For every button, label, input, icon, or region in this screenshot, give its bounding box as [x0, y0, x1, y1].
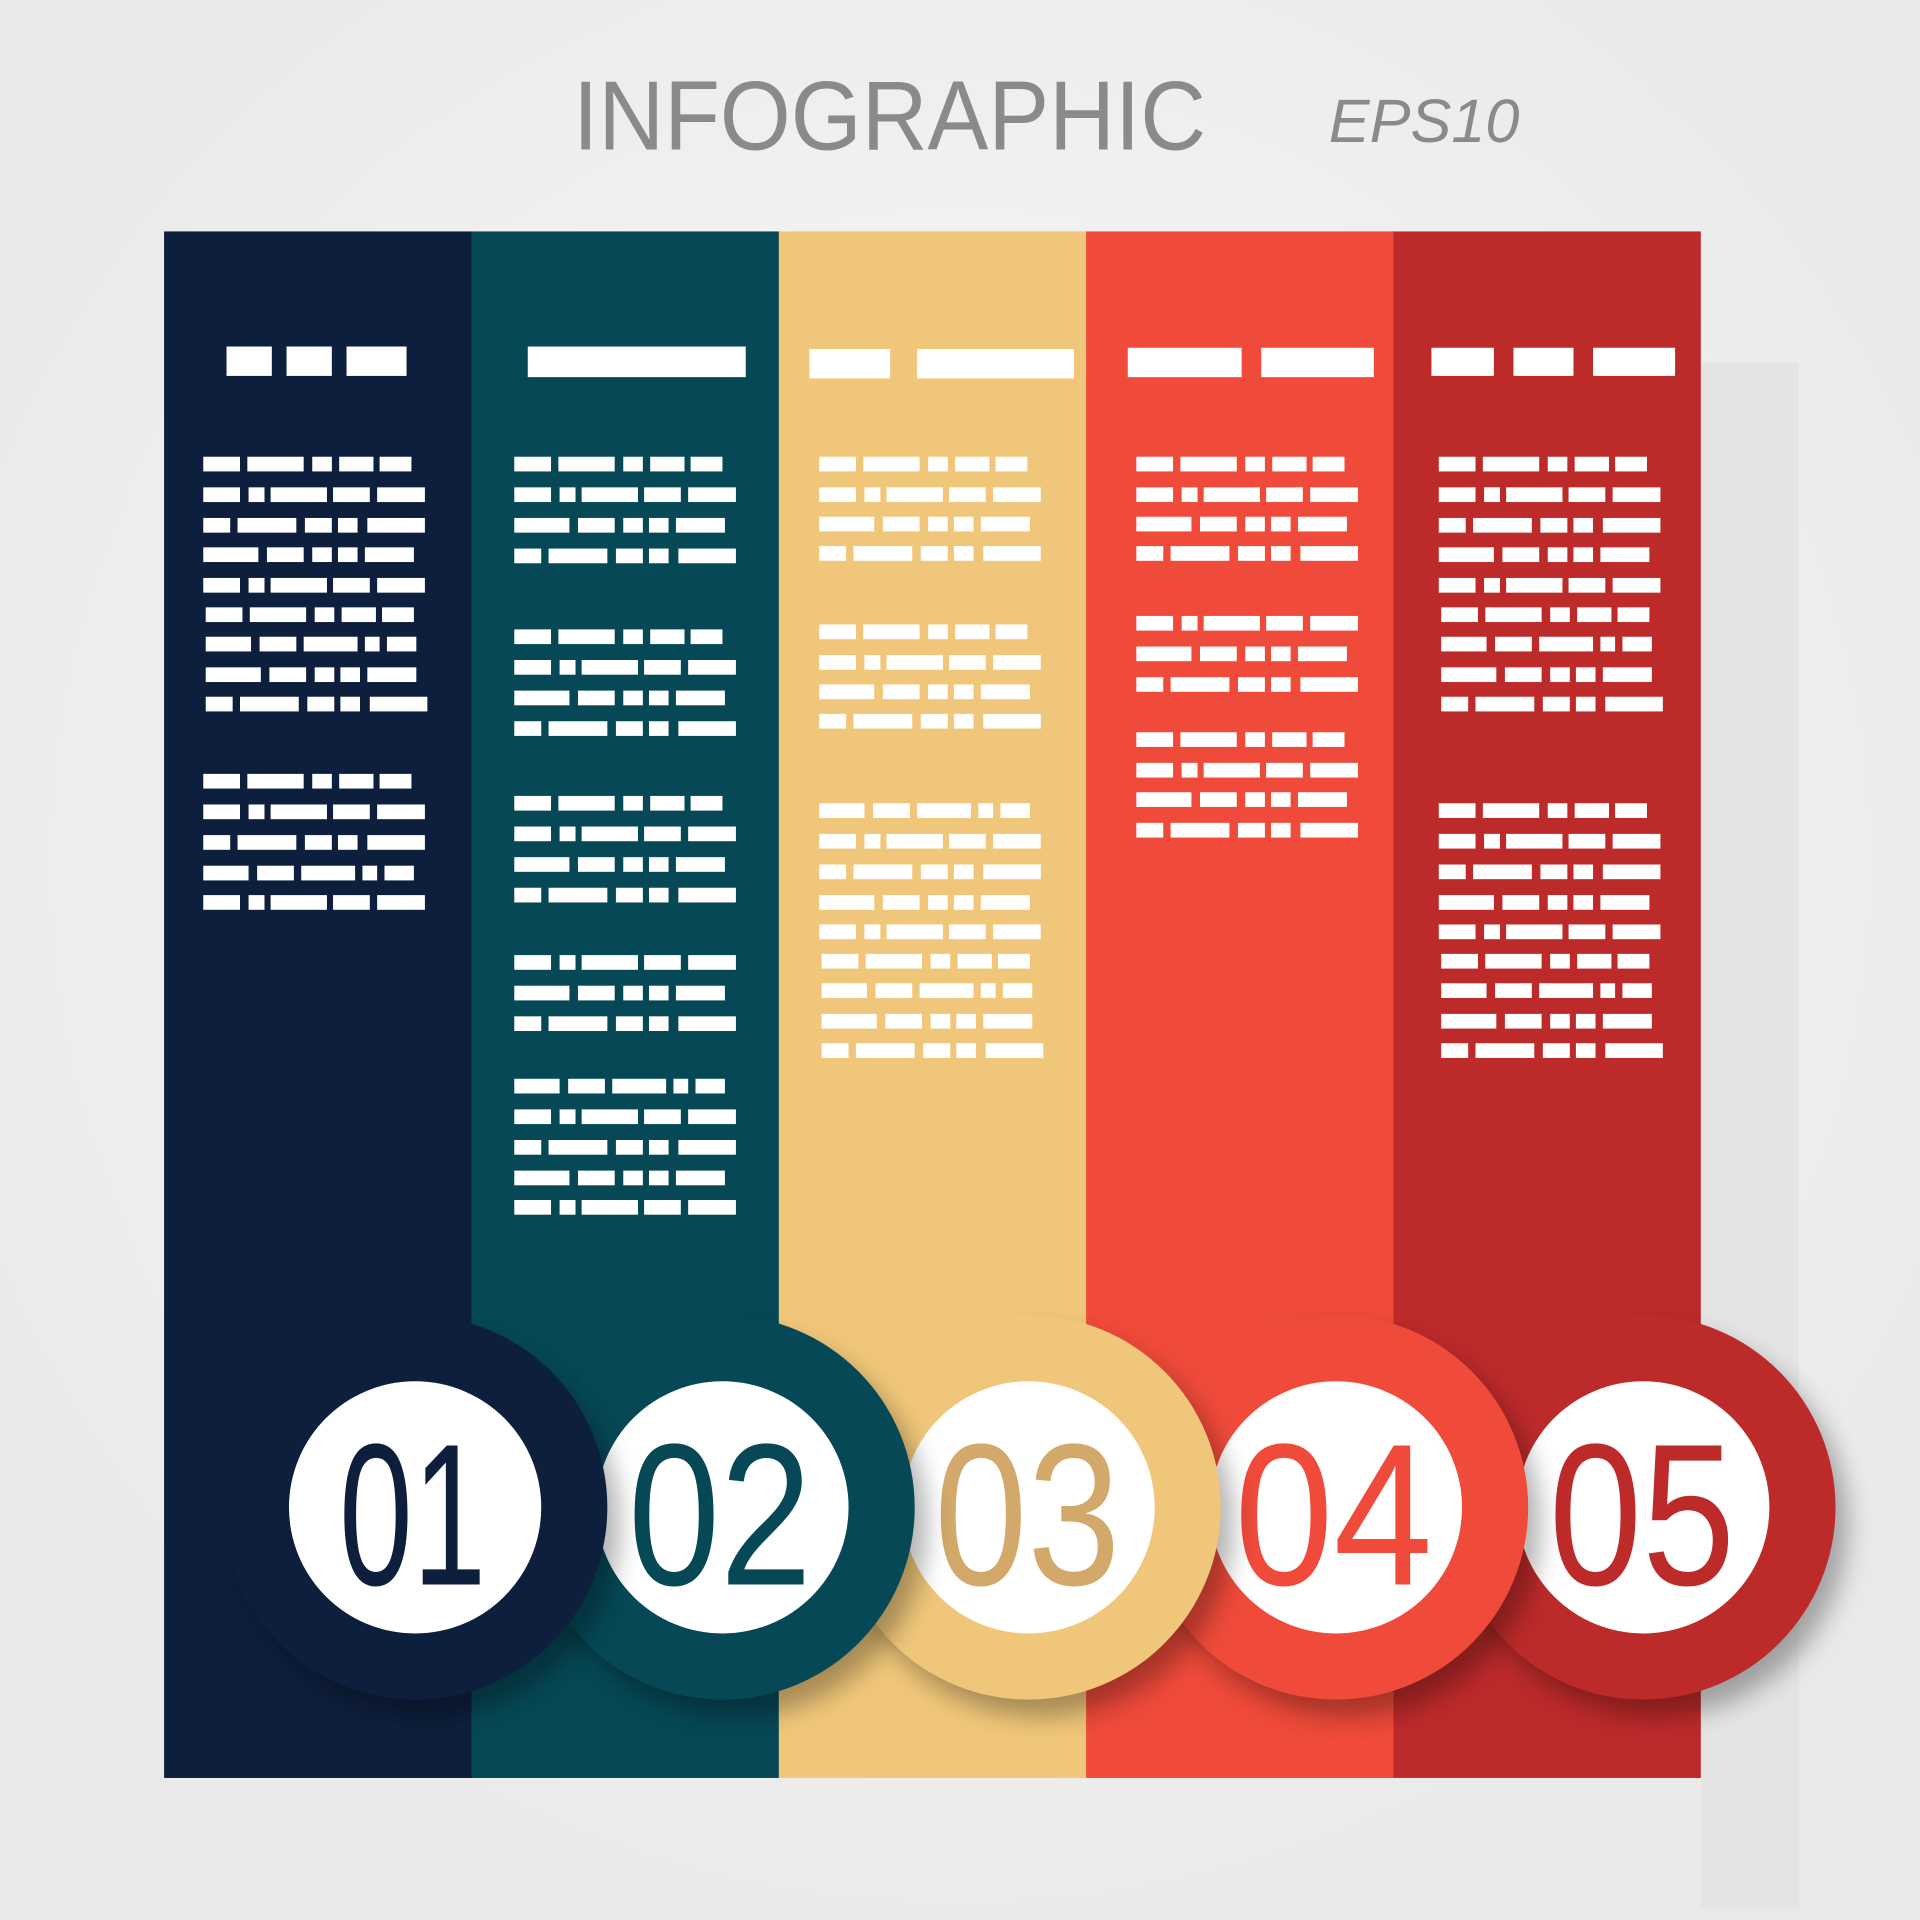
panel: column 4: [1086, 231, 1395, 1778]
badge 02: [530, 1315, 927, 1717]
badge 05: 05: [1549, 1401, 1735, 1627]
badge 03: [836, 1315, 1233, 1717]
panel: column 2: [471, 231, 780, 1778]
title: INFOGRAPHIC: [573, 60, 1206, 170]
badge 03: 03: [934, 1401, 1120, 1627]
panel: column 3: [779, 231, 1087, 1778]
panel: column 1: [164, 231, 473, 1778]
badge 01: 01: [339, 1401, 486, 1627]
badge 02: 02: [628, 1401, 812, 1627]
panel: column 5: [1393, 231, 1701, 1778]
badge 04: 04: [1234, 1401, 1433, 1627]
badge 05: [1451, 1315, 1848, 1717]
badge 04: [1144, 1315, 1540, 1717]
subtitle: EPS10: EPS10: [1329, 87, 1519, 155]
badge 01: [223, 1315, 620, 1717]
